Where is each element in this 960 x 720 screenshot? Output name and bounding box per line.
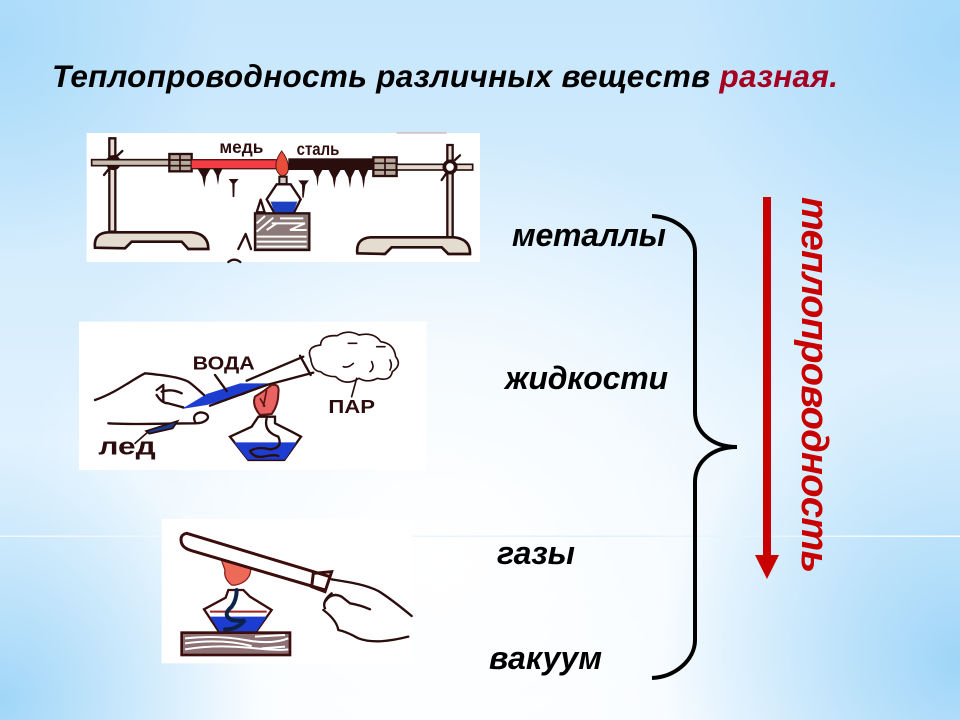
tube labels: лед (98, 433, 156, 460)
wood block (182, 633, 290, 655)
right stand (357, 145, 470, 254)
tube with water (182, 356, 313, 409)
rod labels: медь (219, 137, 263, 157)
left clamp (169, 154, 192, 171)
curly brace (652, 216, 737, 678)
hand (95, 373, 208, 424)
tube labels: ПАР (328, 396, 375, 417)
wood block (255, 213, 309, 250)
rod labels (219, 137, 339, 159)
right horizontal rod (397, 164, 473, 170)
test tube (181, 533, 330, 590)
illustration: copper and steel rods heated by a burner (87, 133, 480, 262)
copper rod (192, 160, 277, 168)
burner (204, 590, 272, 633)
arrow: conductivity decreases (755, 197, 779, 579)
steam cloud (309, 332, 398, 382)
right clamp (373, 157, 397, 176)
flame (276, 151, 288, 176)
left stand (95, 138, 208, 249)
ice piece (146, 421, 178, 434)
hand (323, 579, 412, 641)
label: liquids: жидкости (503, 360, 668, 396)
label: vacuum: вакуум (489, 640, 602, 676)
label: gases: газы (497, 535, 575, 571)
letter lambda label (238, 200, 265, 249)
vertical label: thermal conductivity: теплопроводность (793, 197, 835, 573)
title: Теплопроводность различных веществ разная. (52, 58, 838, 94)
tube labels: ВОДА (193, 352, 255, 373)
steel rod (288, 158, 374, 170)
burner (230, 417, 301, 460)
rod labels: сталь (297, 139, 339, 159)
flame (254, 385, 279, 415)
illustration: test tube heated at the closed end (162, 519, 412, 663)
flame (220, 555, 251, 585)
left horizontal rod (92, 160, 170, 166)
illustration: water boiling in a tube above ice (79, 322, 427, 470)
label: metals: металлы (512, 217, 666, 253)
tube labels (98, 352, 375, 460)
copper wax drips and nails (197, 168, 239, 197)
steel wax drips and nails (298, 169, 368, 198)
burner (267, 177, 301, 214)
